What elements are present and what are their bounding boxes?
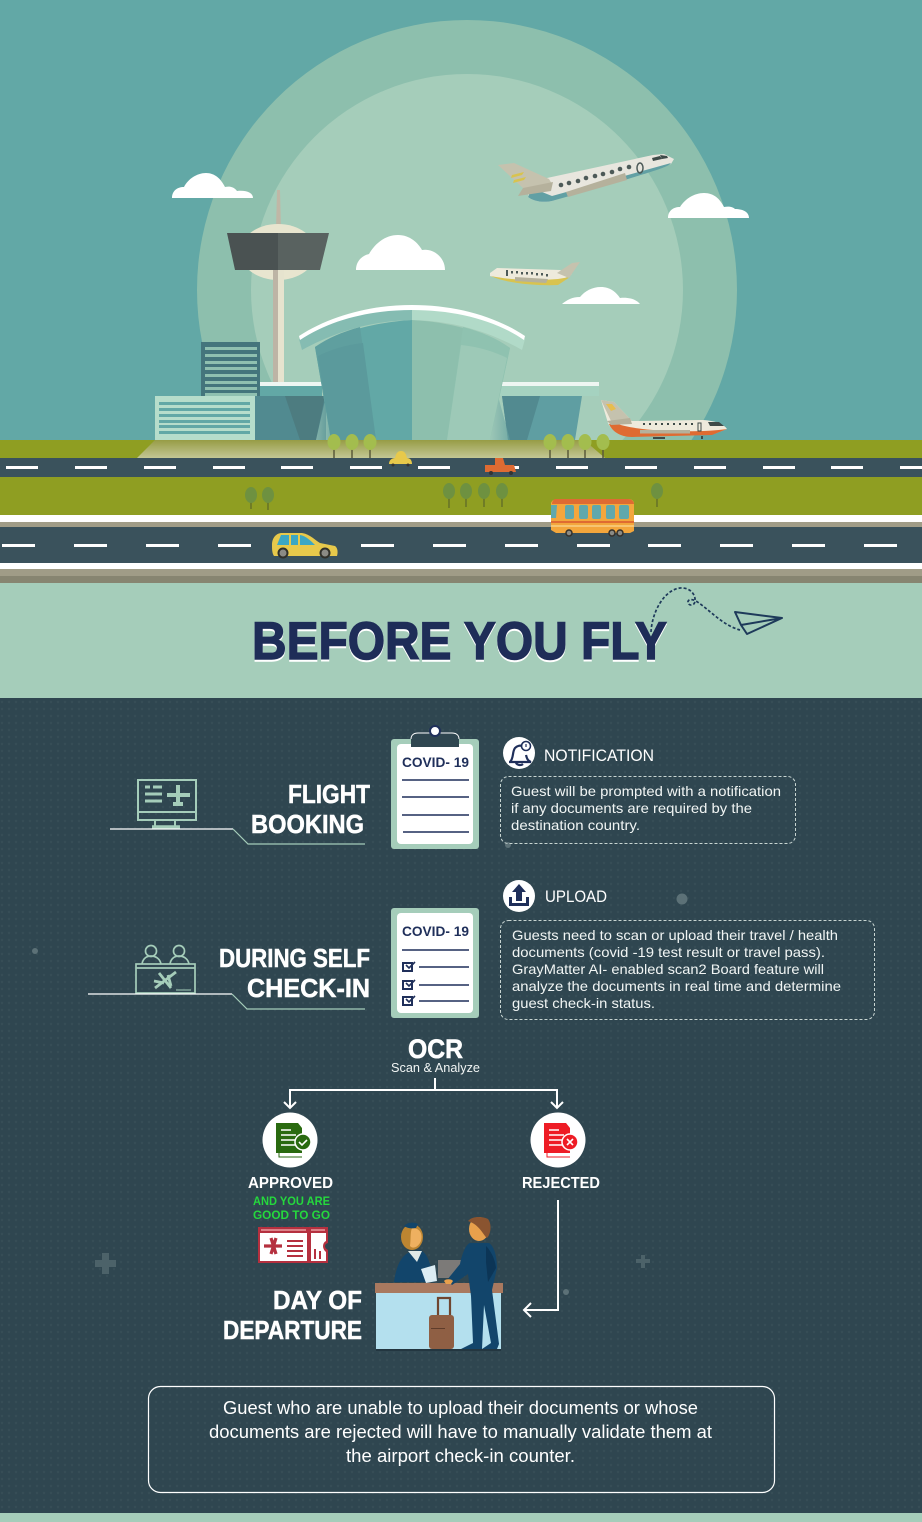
cloud: right: [668, 193, 749, 218]
panel: ground and roads: [0, 434, 922, 583]
notification text box: destination country.: [511, 817, 640, 833]
clipboard: upload checklist: [391, 908, 479, 1018]
callout: manual validation note: Guest who are unable to upload their documents or whose: [223, 1398, 698, 1418]
cloud: center: [356, 235, 445, 270]
traveller: [444, 1217, 499, 1349]
office tower: [201, 342, 260, 402]
trees: plaza: [328, 434, 610, 458]
parking building: [155, 396, 255, 440]
upload text box: guest check-in status.: [512, 995, 655, 1011]
halo: outer circle: [197, 20, 737, 560]
upload header: UPLOAD: [545, 887, 607, 906]
icon: boarding pass: [258, 1227, 328, 1263]
connector: self check-in: [88, 994, 365, 1009]
cloud: small: [562, 287, 640, 304]
road: upper: [0, 458, 922, 477]
upload header: [503, 880, 607, 912]
callout: manual validation note: [148, 1386, 774, 1492]
approved status: [248, 1112, 333, 1222]
cloud: left: [172, 173, 253, 198]
icon: approved document: [276, 1123, 311, 1157]
panel: airport illustration: [0, 0, 922, 560]
callout: manual validation note: the airport check-in counter.: [346, 1446, 575, 1466]
panel: before you fly heading band: [0, 583, 922, 698]
rejected status: [522, 1112, 600, 1192]
illustration: check-in counter: [375, 1217, 503, 1351]
clipboard: upload checklist: COVID- 19: [402, 924, 469, 939]
road: lower: [0, 527, 922, 563]
upload text box: analyze the documents in real time and determine: [512, 978, 841, 994]
clipboard: notification checklist: [391, 726, 479, 849]
heading: during self check-in: DURING SELF: [219, 943, 370, 973]
title: BEFORE YOU FLY: [252, 614, 667, 673]
connector: flight booking: [110, 829, 365, 844]
upload text box: [500, 920, 874, 1020]
computer monitor: [438, 1260, 464, 1278]
heading: flight booking: BOOKING: [251, 809, 364, 839]
title: BEFORE YOU FLY: [252, 612, 667, 671]
heading: day of departure: DAY OF: [273, 1285, 362, 1315]
bus: [551, 499, 634, 536]
plane: on ground: [601, 400, 727, 439]
approved status: AND YOU ARE: [253, 1196, 330, 1208]
approved status: APPROVED: [248, 1175, 333, 1192]
heading: day of departure: DEPARTURE: [223, 1315, 362, 1345]
heading: during self check-in: CHECK-IN: [247, 973, 370, 1003]
notification header: [503, 737, 654, 769]
suitcase: [429, 1298, 454, 1349]
halo: inner circle: [251, 74, 683, 506]
plane: large in flight: [498, 154, 674, 202]
main terminal: [299, 305, 525, 440]
upload text box: documents (covid -19 test result or travel pass).: [512, 944, 825, 960]
OCR label: [391, 1034, 480, 1075]
arrows: OCR branch: [284, 1078, 563, 1108]
heading: flight booking: [251, 779, 370, 839]
notification text box: [500, 776, 796, 844]
upload text box: GrayMatter AI- enabled scan2 Board feature will: [512, 961, 824, 977]
notification text box: Guest will be prompted with a notification: [511, 783, 781, 799]
notification text box: if any documents are required by the: [511, 800, 752, 816]
heading: flight booking: FLIGHT: [288, 779, 370, 809]
icon: paper plane with dashed trail: [651, 588, 782, 634]
approved status: GOOD TO GO: [253, 1210, 330, 1222]
notification header: NOTIFICATION: [544, 746, 654, 765]
OCR label: OCR: [408, 1034, 463, 1064]
callout: manual validation note: documents are rejected will have to manually validate them at: [209, 1422, 712, 1442]
rejected status: REJECTED: [522, 1175, 600, 1192]
OCR label: Scan & Analyze: [391, 1060, 480, 1075]
icon: upload: [509, 884, 529, 906]
icon: self check-in desk: [136, 946, 195, 993]
panel: before you fly process: [0, 698, 922, 1522]
counter desk: [375, 1283, 503, 1351]
car: yellow hatchback: [272, 533, 338, 558]
clipboard: notification checklist: COVID- 19: [402, 755, 469, 770]
icon: flight monitor: [138, 780, 196, 827]
heading: day of departure: [223, 1285, 362, 1345]
icon: rejected document: [544, 1123, 578, 1157]
car: orange pickup: [485, 458, 516, 475]
icon: bell: [509, 742, 531, 765]
agent: [394, 1223, 437, 1283]
heading: during self check-in: [219, 943, 370, 1003]
trees: median: [245, 483, 663, 510]
plaza: [137, 440, 605, 458]
terminal wings: [255, 382, 599, 440]
plane: small in flight: [490, 262, 580, 285]
car: small yellow: [389, 451, 412, 466]
arrow: rejected to counter: [524, 1200, 558, 1317]
upload text box: Guests need to scan or upload their travel / health: [512, 927, 838, 943]
control tower: [227, 190, 329, 382]
